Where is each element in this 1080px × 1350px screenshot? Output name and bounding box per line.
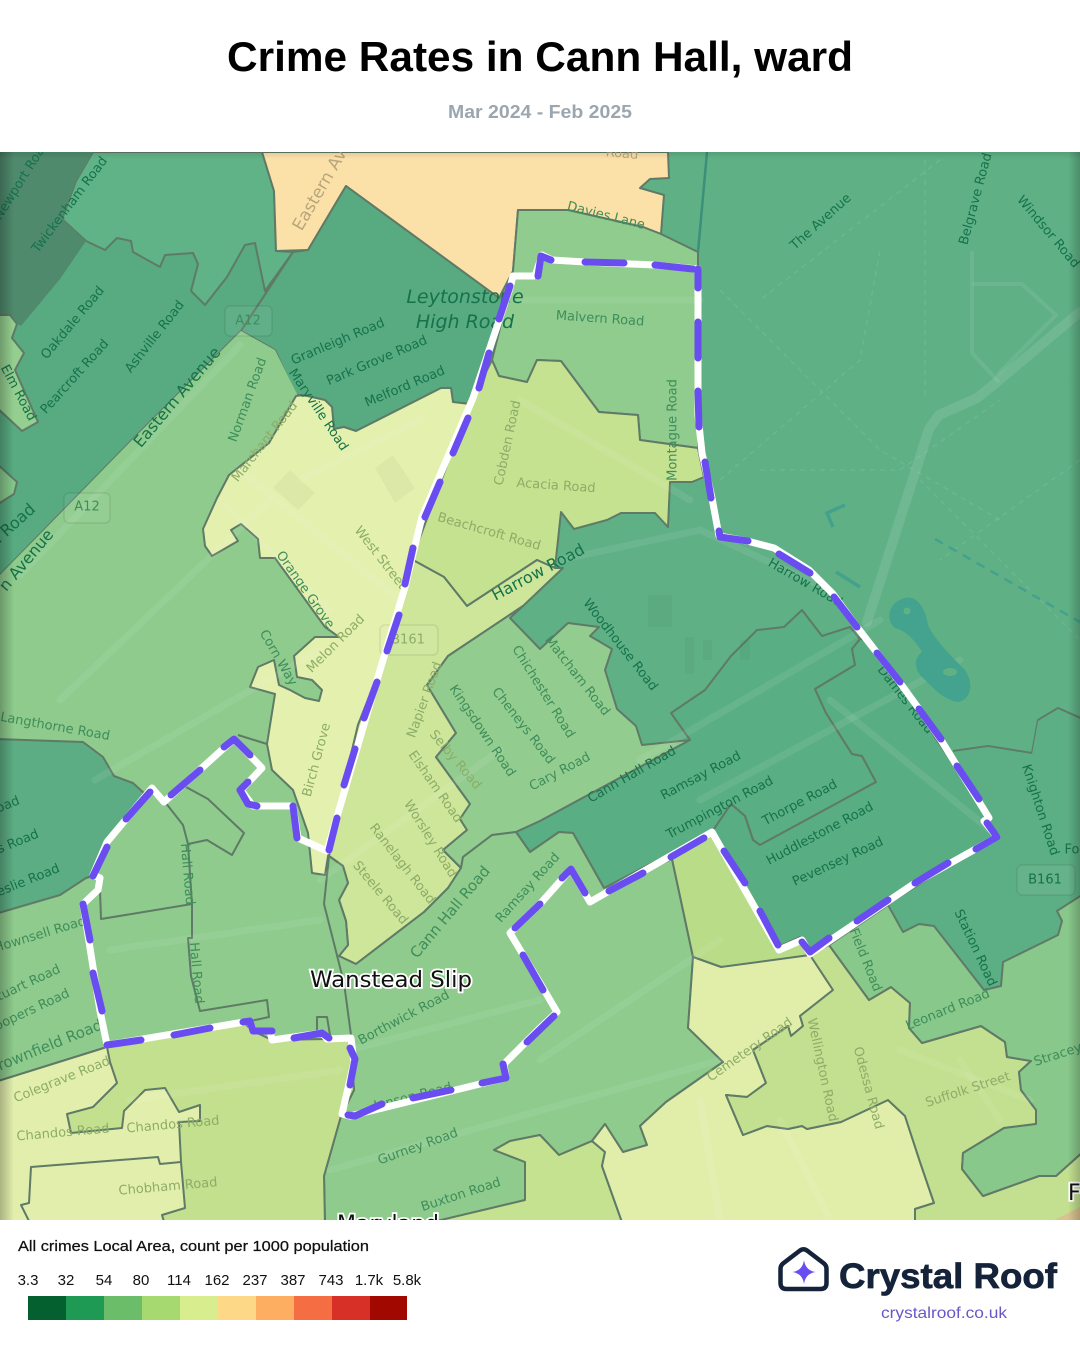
road labels: Chandos Road (16, 1121, 110, 1145)
legend (18, 1238, 422, 1320)
road labels: Steele Road (349, 858, 411, 928)
ward boundary: white base line (83, 255, 997, 1116)
road labels: Kingsdown Road (446, 682, 518, 780)
road labels: Harrow Road (765, 556, 845, 610)
legend scale values: 114 (167, 1272, 191, 1289)
road labels: Field Road (846, 926, 884, 994)
road labels: Colegrave Road (12, 1054, 112, 1106)
road labels: Wellington Road (804, 1017, 840, 1123)
icon: house with star (780, 1249, 826, 1289)
road labels: Chobham Road (118, 1175, 218, 1199)
legend scale values: 3.3 (18, 1272, 38, 1289)
road labels: Granleigh Road (289, 316, 387, 368)
road labels: Suffolk Street (924, 1069, 1012, 1111)
road labels: Ranelagh Road (366, 821, 438, 907)
boundary: Knighton top (953, 708, 1080, 753)
ward boundary: purple dashes (83, 256, 997, 1116)
road labels: Chichester Road (508, 643, 578, 741)
road labels: Corn Way (256, 627, 300, 689)
title: Crime Rates in Cann Hall, ward (227, 33, 853, 80)
road labels: Pevensey Road (790, 834, 886, 890)
road labels: Cobden Road (492, 399, 524, 487)
road labels: Gurney Road (376, 1126, 460, 1168)
road labels: Hall Road (177, 843, 197, 905)
road labels: Cann Hall Road (406, 862, 494, 962)
legend scale values: 162 (204, 1272, 230, 1289)
area: Park Grove (241, 186, 510, 431)
road labels: Cheneys Road (489, 685, 557, 767)
road labels: Elsham Road (405, 748, 465, 826)
road labels: Napier Road (404, 660, 446, 740)
legend scale values: 32 (58, 1272, 74, 1289)
road labels: Davies Lane (566, 199, 646, 233)
road labels: A12 (74, 500, 100, 514)
park footpaths (720, 160, 1080, 640)
road labels: Dames Road (874, 663, 936, 737)
area: Langthorne south dark (0, 739, 145, 914)
legend scale values: 80 (133, 1272, 149, 1289)
road labels: Cary Road (527, 750, 593, 794)
area: Oakdale and Eastern Avenue (0, 292, 266, 575)
area: Newport Road darkest (0, 152, 93, 326)
legend scale values: 54 (96, 1272, 112, 1289)
road labels: Harrow Road (488, 540, 588, 604)
legend scale values (18, 1272, 422, 1289)
road labels: High Road (416, 311, 515, 333)
road labels: Cemetery Road (704, 1015, 796, 1085)
road labels: Malvern Road (555, 308, 645, 330)
road labels: Janson Road (372, 1080, 454, 1114)
area: Field and Stracey (829, 893, 1080, 1196)
subtitle: date range: Mar 2024 - Feb 2025 (448, 102, 632, 122)
road labels: Cann Hall Road (585, 744, 679, 806)
road labels: Borthwick Road (356, 988, 452, 1048)
legend scale values: 1.7k (355, 1272, 384, 1289)
area: south green (438, 1134, 620, 1220)
road labels: Ramsay Road (493, 850, 563, 926)
road labels: Melon Road (304, 612, 368, 676)
area: Ramsay and Borthwick south central (324, 832, 723, 1225)
road labels: Maryville Road (285, 366, 351, 454)
legend colour bar (28, 1296, 407, 1320)
area: left edge pocket (0, 462, 17, 506)
road labels: Buxton Road (419, 1175, 503, 1215)
legend scale values: 237 (242, 1272, 268, 1289)
road labels: Hall Road (186, 942, 206, 1004)
road labels: A12 (235, 314, 261, 328)
area: corner tan (1055, 1207, 1080, 1220)
area: east boundary stroke (698, 152, 707, 252)
area: Twickenham upper block (62, 152, 293, 305)
road labels: Twickenham Road (28, 154, 111, 257)
map base: Wanstead Flats area (502, 152, 1080, 906)
road labels: The Avenue (787, 191, 854, 254)
road labels: B161 (1028, 872, 1062, 888)
area: West Street pale (203, 388, 470, 875)
legend title: All crimes Local Area, count per 1000 population (18, 1238, 369, 1255)
road labels: Huddlestone Road (764, 799, 876, 869)
road labels: Fo (1065, 842, 1080, 858)
area: Malvern (492, 210, 698, 448)
road labels: Road (605, 145, 639, 163)
map edge shading (0, 152, 1080, 1220)
road labels: Montague Road (666, 379, 680, 481)
boundary: Orange Grove wedge edge (238, 735, 267, 744)
area: Acacia and Cobden (413, 360, 704, 606)
road labels: Norman Road (226, 356, 270, 444)
legend scale values: 387 (280, 1272, 306, 1289)
road labels: Woodhouse Road (580, 596, 660, 694)
place label: Wanstead Slip: Wanstead Slip (310, 968, 472, 993)
legend scale values: 743 (318, 1272, 344, 1289)
road labels: Matcham Road (541, 633, 613, 719)
road labels: Station Road (951, 907, 999, 989)
road labels: Chandos Road (126, 1113, 220, 1137)
small building blocks (273, 455, 750, 674)
boundary: Chobham line (21, 1157, 181, 1225)
road labels: Ashville Road (122, 298, 188, 376)
road labels: Selby Road (426, 727, 484, 793)
road labels: West Street (351, 524, 409, 592)
area: Huddlestone block (713, 638, 952, 900)
road labels: Trumpington Road (663, 774, 776, 843)
area: Napier and Steele (329, 560, 563, 964)
road labels: Park Grove Road (324, 333, 430, 389)
road labels: Melford Road (363, 363, 447, 411)
road labels: Birch Grove (300, 721, 334, 799)
road labels: B161 (391, 632, 425, 648)
road labels: Worsley Road (400, 798, 460, 880)
area: Cann Hall Road band (516, 610, 876, 888)
water: pond (889, 597, 970, 702)
road labels: Oakdale Road (38, 284, 108, 362)
road labels: Acacia Road (516, 476, 596, 496)
road labels: Eastern Avenue (129, 343, 225, 451)
road labels: Beachcroft Road (436, 510, 542, 554)
logo url: crystalroof.co.uk (881, 1305, 1008, 1322)
road labels: Ramsay Road (658, 749, 744, 803)
water: stream marks (827, 505, 1080, 622)
area: Elm Road sliver (0, 315, 38, 431)
legend scale values: 5.8k (393, 1272, 422, 1289)
area: Colegrave and Chandos pale (0, 1047, 200, 1225)
area: top orange (262, 152, 669, 298)
road labels: Marchant Road (229, 399, 301, 485)
road labels (0, 137, 1080, 1215)
area: Chichester and Matcham (427, 606, 690, 868)
road labels: Pearcroft Road (38, 337, 112, 417)
logo: Crystal Roof (780, 1249, 1057, 1322)
area: Knighton and Station (889, 709, 1060, 906)
road labels: Odessa Road (850, 1045, 886, 1131)
logo wordmark: Crystal Roof (839, 1257, 1057, 1296)
area: south-west yellow green (0, 1022, 354, 1225)
road labels: Langthorne Road (0, 710, 111, 744)
road labels: Orange Grove (273, 548, 337, 632)
area: west big mid green (0, 331, 350, 1080)
road labels: Leytonstone (406, 286, 524, 308)
road labels: Belgrave Road (957, 151, 995, 247)
road labels: Eastern Av (289, 146, 351, 234)
area: Wellington and Suffolk (726, 945, 1080, 1225)
boundaries: Hall Road blocks (100, 787, 330, 1035)
area: Cemetery and south pale (592, 955, 934, 1225)
road labels: Thorpe Road (759, 777, 840, 829)
area: Trumpington triangle (672, 832, 810, 967)
place label: Maryland: Maryland (337, 1212, 439, 1237)
road labels: Knighton Road (1018, 763, 1062, 857)
road labels: Leonard Road (904, 986, 992, 1034)
road shields (64, 306, 1075, 895)
park roads and street network (20, 253, 1080, 1220)
